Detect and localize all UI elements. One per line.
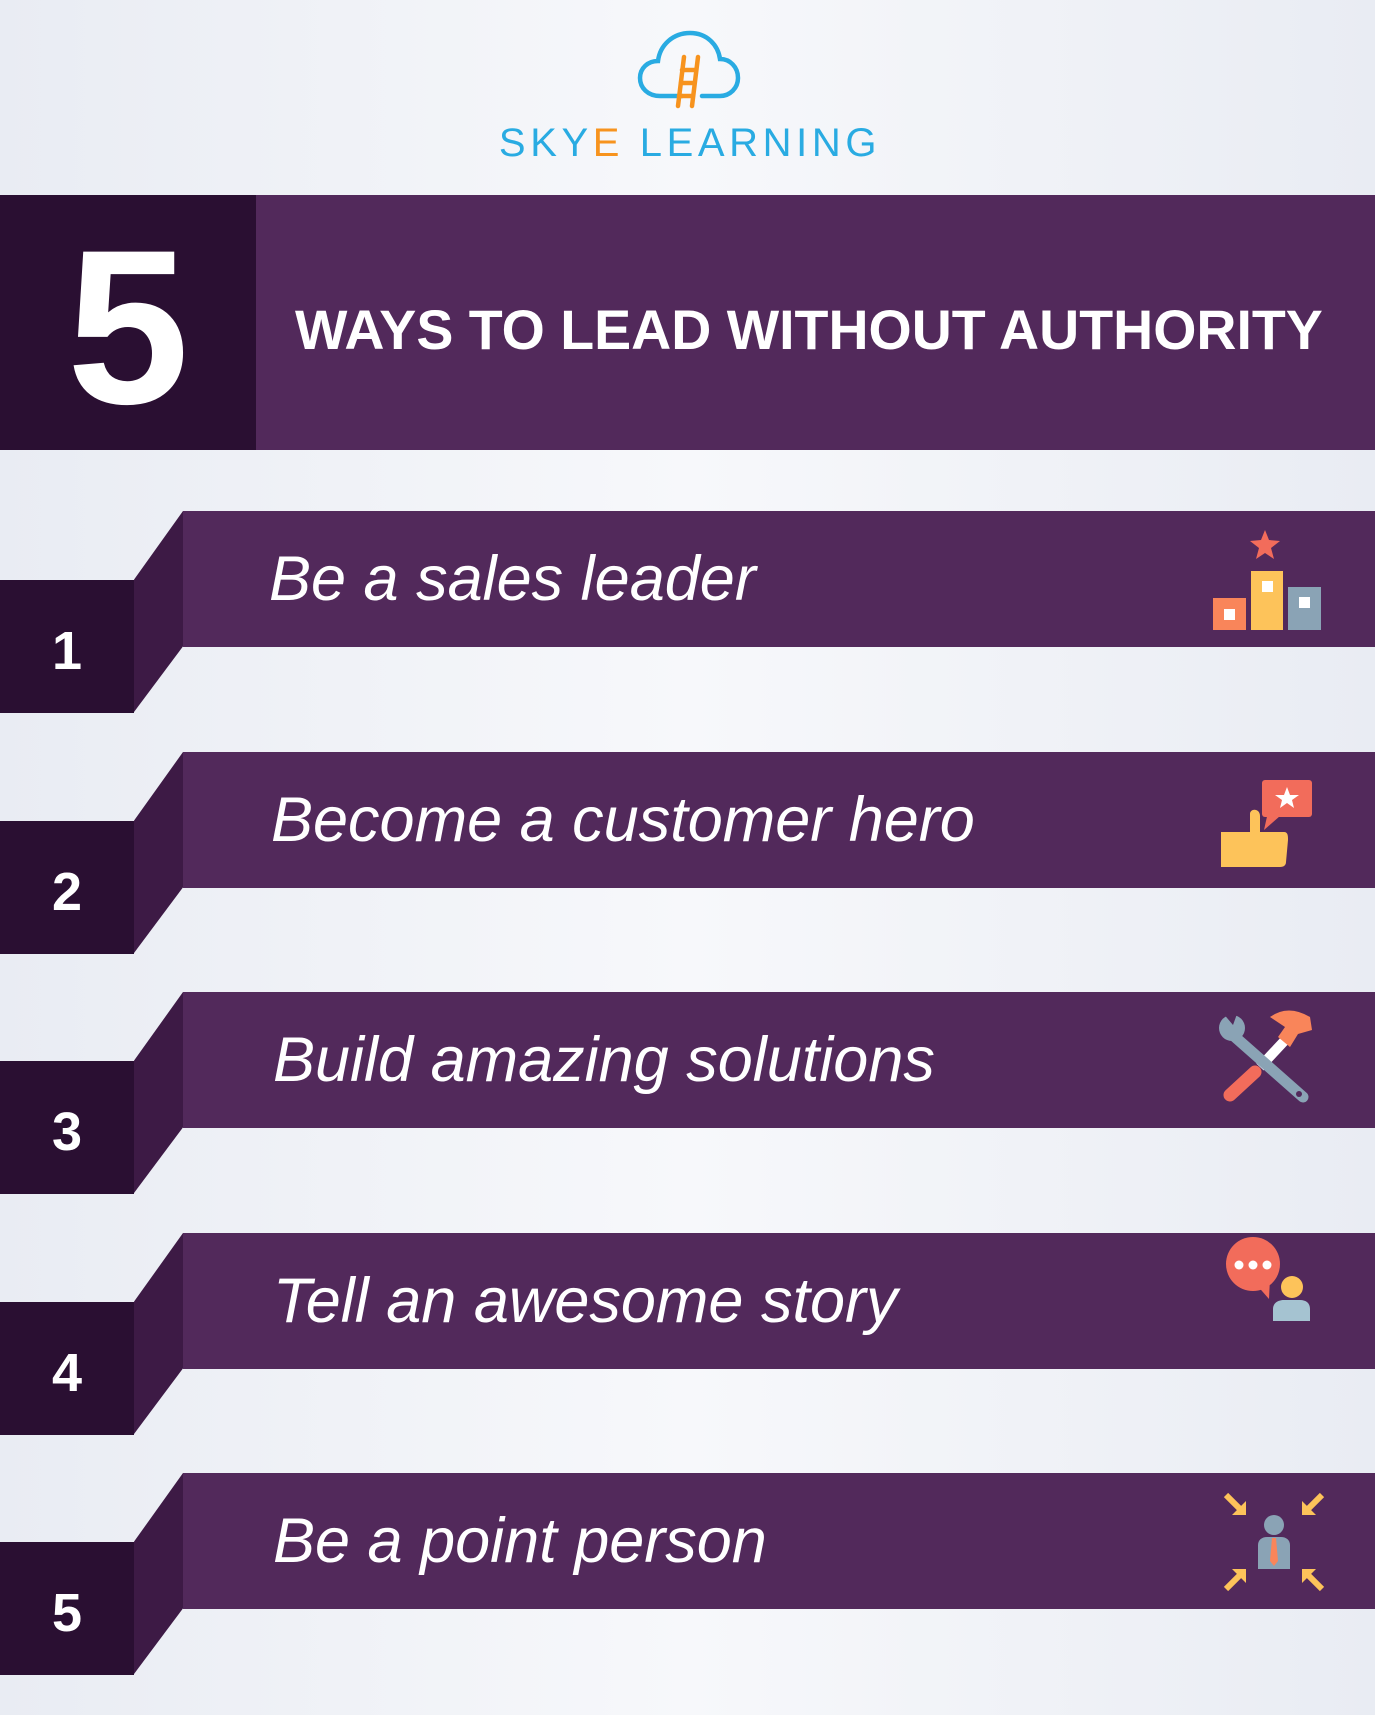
icon: podium [1213,530,1321,630]
logo text: SKYE LEARNING [499,121,881,165]
item 1 [0,511,1375,713]
step side [134,1473,183,1674]
text: Tell an awesome story [273,1266,897,1336]
item 3 [0,992,1375,1194]
item 4 [0,1233,1375,1435]
step side [134,992,183,1193]
item 5 [0,1473,1375,1675]
step side [134,511,183,712]
icon: point person [1224,1492,1324,1592]
step side [134,1233,183,1434]
bar [183,1473,1375,1609]
text: Be a sales leader [269,544,756,614]
icon: cloud with ladder [638,30,740,108]
bar [183,992,1375,1128]
number 2: 2 [52,862,82,922]
number 4 [0,1302,134,1435]
number 1: 1 [52,621,82,681]
number 5: 5 [52,1583,82,1643]
header banner [0,195,1375,450]
big number 5: 5 [67,204,189,450]
text: Be a point person [273,1506,767,1576]
logo [499,30,881,165]
bar [183,1233,1375,1369]
number 2 [0,821,134,954]
number 5 [0,1542,134,1675]
number 3: 3 [52,1102,82,1162]
icon: tools [1219,1010,1312,1102]
text: Build amazing solutions [273,1025,935,1095]
text: Become a customer hero [271,785,975,855]
step side [134,752,183,953]
big number 5 [0,195,256,450]
title: WAYS TO LEAD WITHOUT AUTHORITY [295,299,1323,361]
number 4: 4 [52,1343,82,1403]
icon: thumbs up [1221,780,1312,867]
bar [183,511,1375,647]
item 2 [0,752,1375,954]
number 1 [0,580,134,713]
number 3 [0,1061,134,1194]
icon: speech and person [1226,1237,1310,1321]
bar [183,752,1375,888]
